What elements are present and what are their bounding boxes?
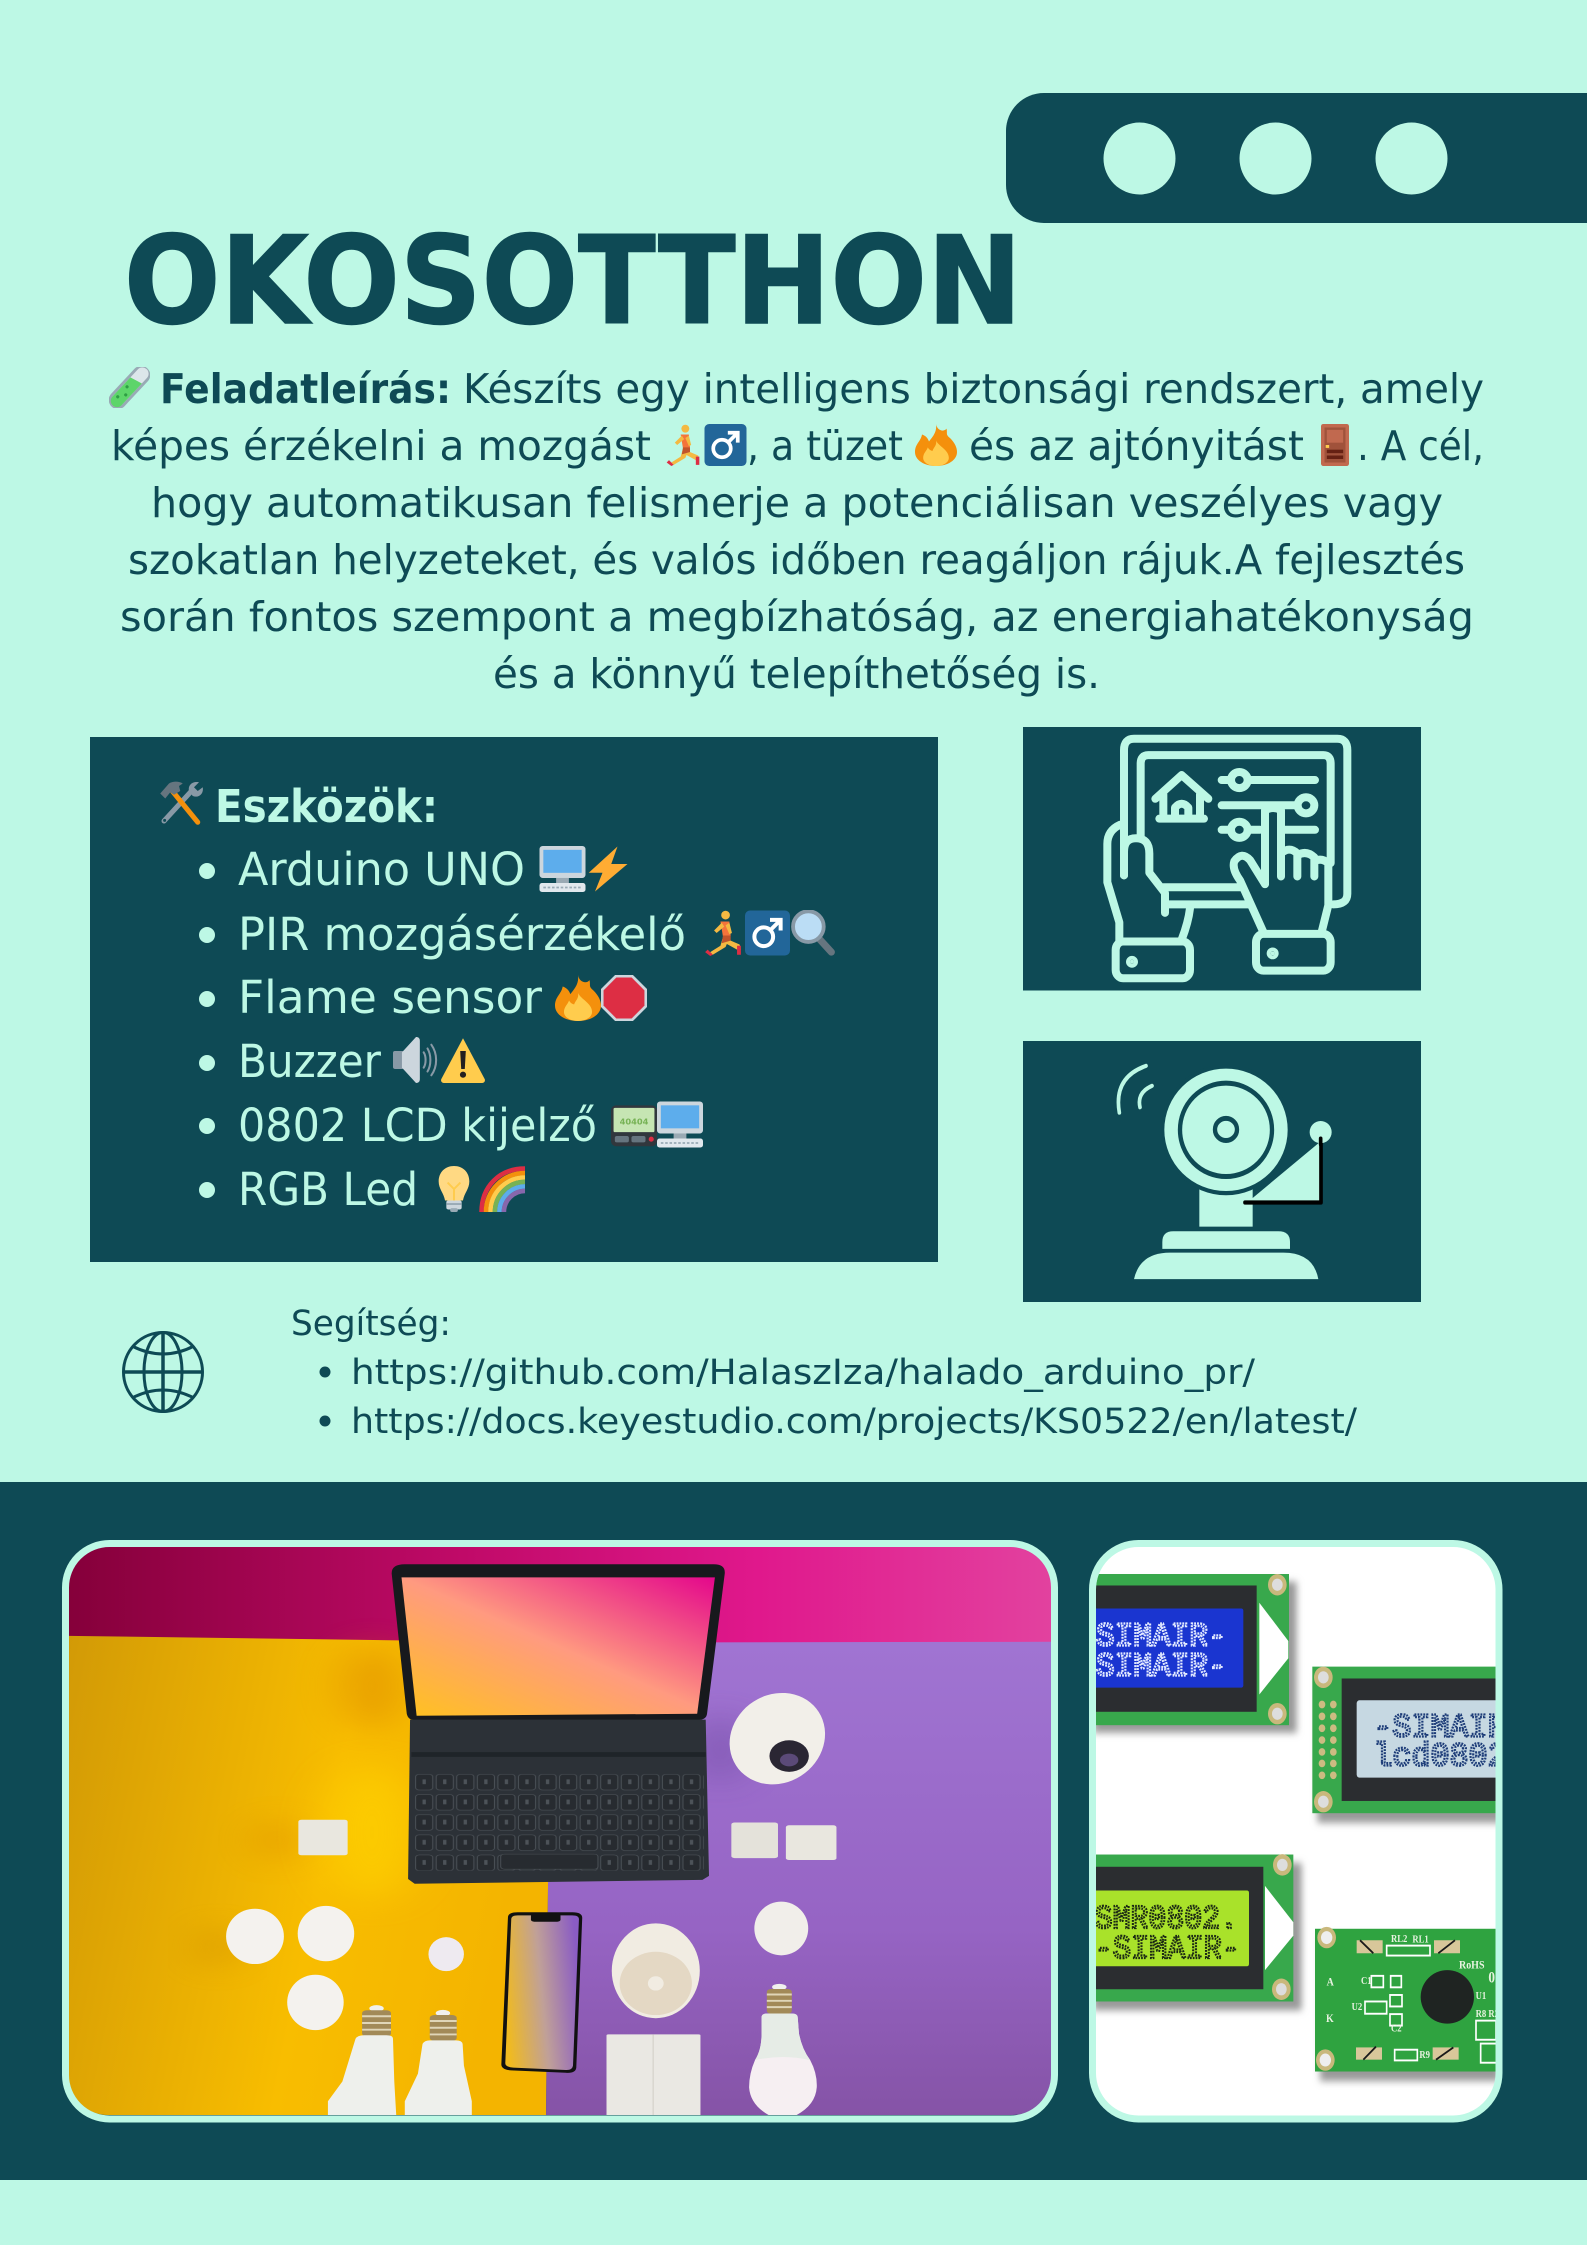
- LCD module: blue: SIMAIR-: [1096, 1619, 1227, 1656]
- LCD module: back side PCB: R9: [1419, 2051, 1430, 2061]
- task description paragraph: képes érzékelni a mozgást: [111, 422, 651, 470]
- list item: RGB led: RGB Led: [238, 1163, 418, 1216]
- task description paragraph: . A cél,: [1357, 422, 1484, 470]
- LCD module: yellow-green: [1093, 1854, 1302, 2010]
- heading: tools: Eszközök:: [215, 780, 438, 833]
- help links: https://docs.keyestudio.com/projects/KS0522/en/latest/: [351, 1402, 1357, 1442]
- list item: buzzer: Buzzer: [238, 1035, 381, 1088]
- panel: smart home tablet icon: [1023, 727, 1421, 990]
- icon: runner: [667, 425, 699, 466]
- LCD module: blue: SIMAIR-: [1096, 1649, 1227, 1686]
- list item: Arduino UNO: [199, 843, 628, 896]
- icon: alarm bell: [1118, 1064, 1332, 1279]
- tablet screen and frame: [392, 1564, 725, 1720]
- LCD module: light grey: [1312, 1667, 1507, 1823]
- task description paragraph: Készíts egy intelligens biztonsági rendszert, amely: [463, 365, 1484, 413]
- help links: https://github.com/HalaszIza/halado_arduino_pr/: [351, 1353, 1255, 1393]
- LCD module: back side PCB: [1315, 1927, 1500, 2081]
- LCD module: back side PCB: RL2: [1391, 1934, 1408, 1945]
- help links: [291, 1304, 1357, 1442]
- icon: door: [1321, 424, 1349, 466]
- task description paragraph: [105, 362, 1484, 698]
- LCD module: yellow-green: -SIMAIR-: [1095, 1931, 1240, 1969]
- LCD module: light grey: lcd0802: [1373, 1739, 1507, 1776]
- icon: hammer and wrench: [160, 782, 203, 822]
- bottom dark band: [0, 1482, 1587, 2180]
- LCD module: back side PCB: R8 R2: [1476, 2009, 1499, 2020]
- list item: flame sensor: Flame sensor: [238, 971, 542, 1024]
- keyboard case: [408, 1720, 709, 1884]
- list item: PIR sensor: PIR mozgásérzékelő: [238, 908, 686, 961]
- title: OKOSOTTHON: [124, 211, 1022, 352]
- list item: buzzer: [199, 1035, 485, 1088]
- task description paragraph: során fontos szempont a megbízhatóság, az energiahatékonyság: [120, 593, 1474, 641]
- LCD module: back side PCB: RoHS: [1459, 1959, 1485, 1972]
- icon: globe: [124, 1332, 202, 1412]
- LCD module: back side PCB: U2: [1352, 2002, 1363, 2013]
- task description paragraph: és a könnyű telepíthetőség is.: [493, 650, 1100, 698]
- LCD module: back side PCB: C2: [1391, 2024, 1402, 2035]
- icon: male sign: [704, 424, 746, 466]
- LCD module: back side PCB: K: [1326, 2012, 1334, 2025]
- task description paragraph: szokatlan helyzeteket, és valós időben reagáljon rájuk.A fejlesztés: [128, 536, 1465, 584]
- LCD module: back side PCB: U1: [1476, 1992, 1487, 2002]
- decorative window bar with three dots: [1006, 93, 1587, 223]
- LCD module: back side PCB: RL1: [1412, 1935, 1429, 1946]
- smart bulbs: [328, 1984, 817, 2115]
- panel: alarm bell icon: [1023, 1041, 1421, 1302]
- panel: tools list: [90, 737, 938, 1262]
- task description paragraph: Feladatleírás:: [160, 365, 451, 413]
- list item: RGB led: [199, 1163, 525, 1216]
- LCD module: back side PCB: 0: [1488, 1970, 1495, 1987]
- list item: LCD display: 0802 LCD kijelző: [238, 1099, 597, 1152]
- task description paragraph: , a tüzet: [747, 422, 903, 470]
- task description paragraph: hogy automatikusan felismerje a potenciálisan veszélyes vagy: [151, 479, 1443, 527]
- LCD module: light grey: -SIMAIR: [1373, 1710, 1507, 1747]
- LCD module: yellow-green: SMR0802.: [1095, 1901, 1238, 1939]
- list item: flame sensor: [199, 971, 647, 1024]
- icon: hands on tablet: [1107, 739, 1347, 978]
- photo: smart home devices on coloured paper: [66, 1544, 1054, 2119]
- help links: Segítség:: [291, 1304, 451, 1344]
- LCD module: blue: [1093, 1574, 1297, 1733]
- LCD module: back side PCB: C1: [1361, 1976, 1372, 1987]
- list item: Arduino UNO: Arduino UNO: [238, 843, 525, 896]
- LCD module: back side PCB: A: [1327, 1976, 1334, 1989]
- icon: fire: [915, 424, 957, 466]
- photo: LCD display modules: [1092, 1543, 1507, 2119]
- icon: test tube: [105, 362, 154, 413]
- devices on paper: [730, 1693, 826, 1784]
- task description paragraph: és az ajtónyitást: [969, 422, 1304, 470]
